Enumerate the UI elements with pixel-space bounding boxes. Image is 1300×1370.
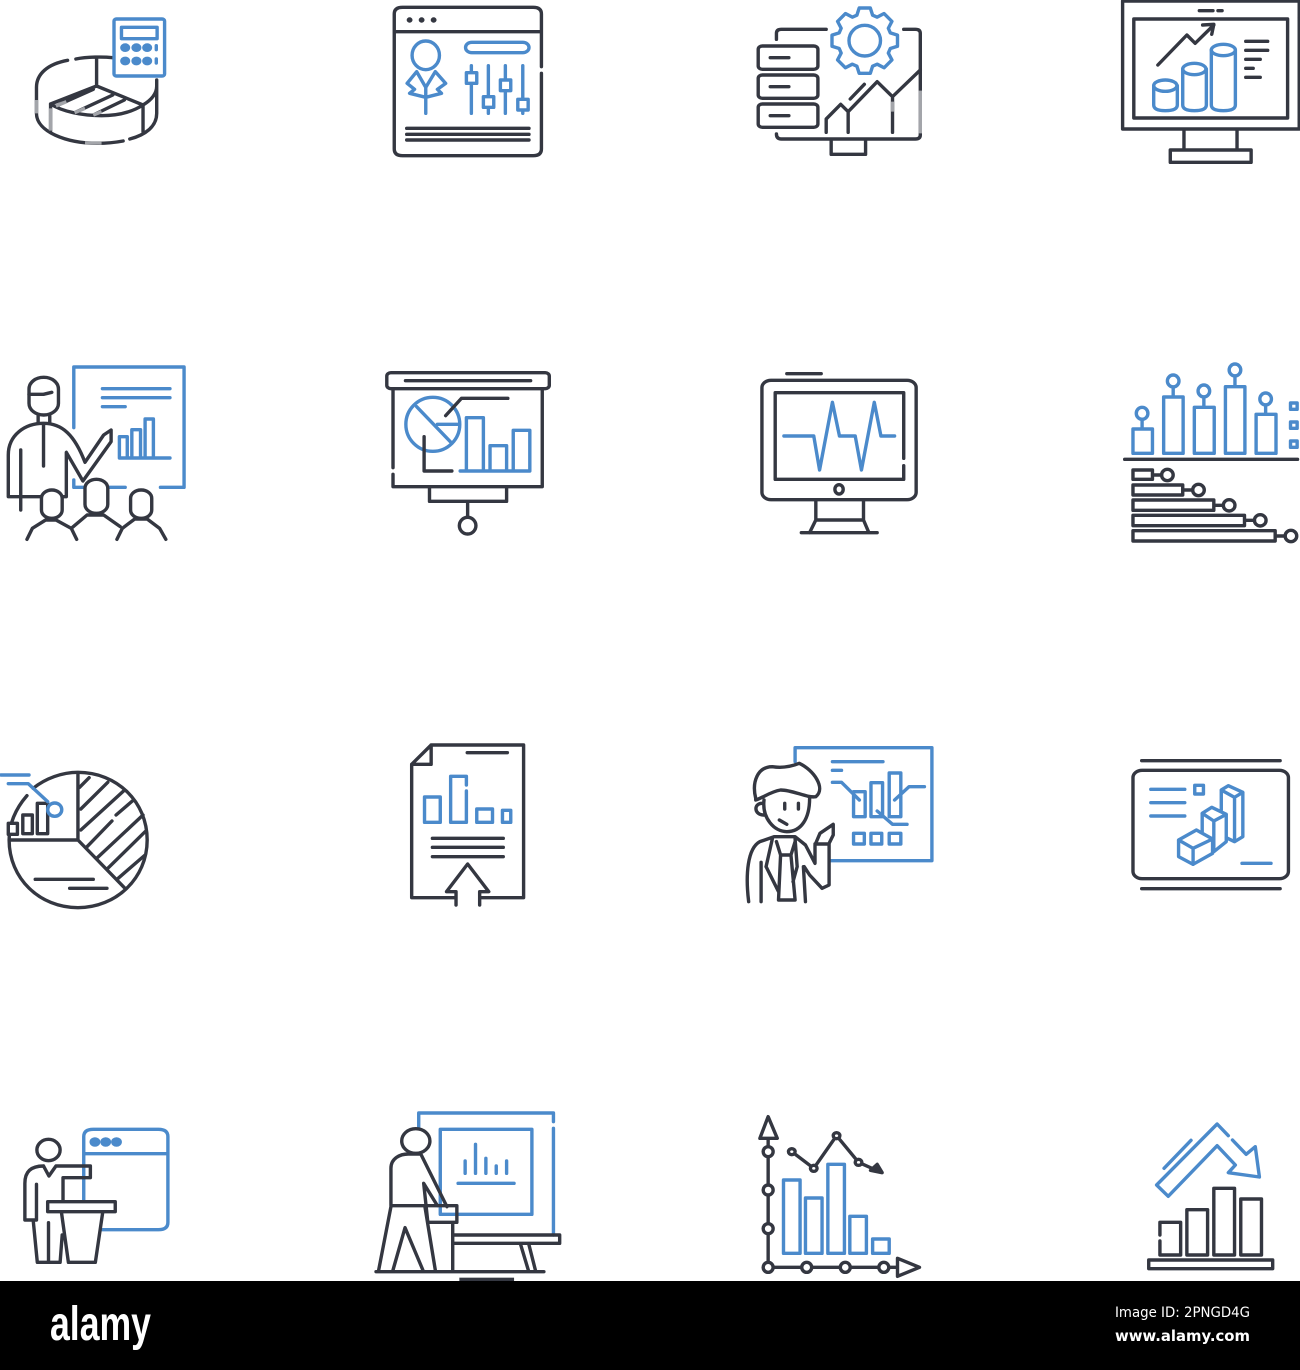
icon: speaker at podium with browser window — [25, 1129, 168, 1262]
icon: monitor with growth cylinders — [1123, 1, 1299, 162]
footer: alamy logo: alamy — [50, 1298, 151, 1351]
footer: image ID: Image ID: 2PNGD4G — [1115, 1305, 1250, 1321]
footer: website: www.alamy.com — [1115, 1327, 1250, 1345]
icon: profile window with sliders — [394, 7, 541, 156]
icon: servers, gear and rising chart — [758, 8, 920, 154]
icon: hatched pie chart with small bars — [1, 772, 147, 908]
footer bar — [0, 1281, 1300, 1370]
icon: businessman beside chart board — [747, 748, 932, 902]
icon: vertical and horizontal lollipop bars — [1125, 364, 1298, 542]
icon: report document with upload arrow — [412, 745, 524, 905]
icon: projection screen with charts — [387, 373, 549, 534]
icon: monitor with pulse line — [762, 374, 916, 533]
icon: pie chart with calculator — [36, 19, 165, 143]
icon: presenter with audience — [8, 367, 184, 539]
icon: presenter at desk with screen — [376, 1113, 560, 1281]
icon: axes with falling bars and line — [760, 1117, 919, 1276]
icon: tablet with 3D bar chart — [1133, 761, 1288, 889]
icon: bars with downward arrow — [1149, 1124, 1273, 1269]
